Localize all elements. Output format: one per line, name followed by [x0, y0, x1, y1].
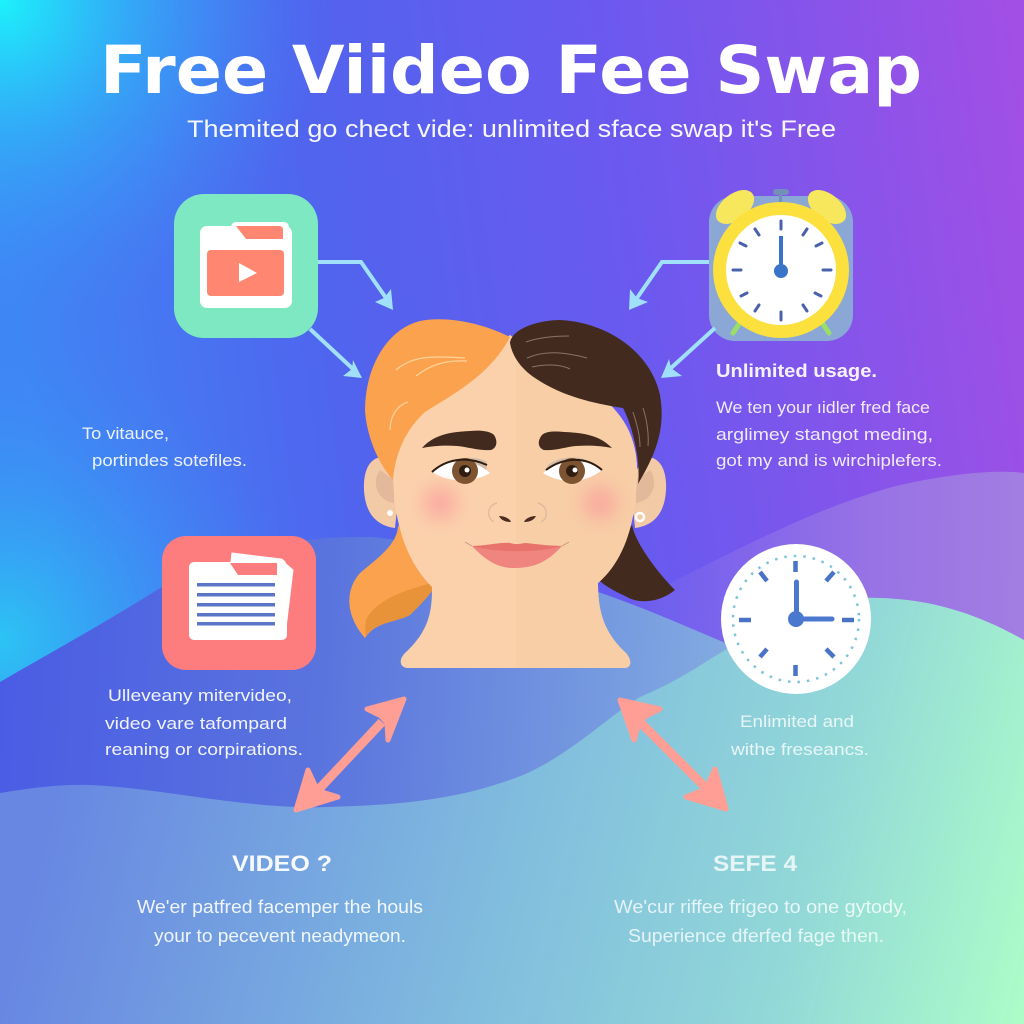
arrow: video folder to head, upper [318, 262, 393, 310]
text block: left upper: portindes sotefiles. [92, 451, 247, 470]
text block: left lower: reaning or corpirations. [105, 740, 303, 759]
icon: video folder [174, 194, 318, 338]
title: Free Viideo Fee Swap [100, 32, 922, 109]
text block: video: VIDEO ? [232, 851, 332, 876]
ear right [630, 457, 666, 528]
text block: unlimited usage: Unlimited usage. [716, 361, 877, 381]
hair lower dark [596, 525, 675, 601]
text block: left lower: video vare tafompard [105, 714, 287, 733]
icon: document folder [162, 536, 316, 670]
text block: video: We'er patfred facemper the houls [137, 897, 423, 917]
skin: face and neck [393, 335, 637, 668]
hair orange [365, 319, 510, 480]
text block: unlimited usage: got my and is wirchiplefers. [716, 451, 942, 470]
text block: video: your to pecevent neadymeon. [154, 926, 406, 946]
text block: left upper [82, 424, 247, 470]
double arrow: lower left [296, 699, 404, 810]
earrings [387, 510, 393, 516]
text block: video [137, 851, 423, 946]
text block: right lower [730, 712, 869, 759]
text block: right lower: Enlimited and [740, 712, 854, 731]
blush [423, 486, 457, 520]
eyebrow right [539, 431, 612, 450]
text block: safe [614, 851, 907, 946]
text block: left upper: To vitauce, [82, 424, 169, 443]
ponytail orange [349, 525, 436, 638]
double arrow: lower right [620, 700, 726, 809]
text block: left lower [105, 686, 303, 759]
eye left [432, 458, 490, 484]
text block: safe: Superience dferfed fage then. [628, 926, 884, 946]
eye right [543, 457, 602, 484]
arrow: alarm clock to head, lower [661, 328, 715, 378]
text block: right lower: withe freseancs. [730, 740, 869, 759]
text block: unlimited usage: We ten your ıidler fred face [716, 398, 930, 417]
central face illustration [349, 319, 675, 668]
subtitle: Themited go chect vide: unlimited sface swap it's Free [187, 116, 836, 143]
arrow: alarm clock to head, upper [629, 262, 709, 310]
hair dark [510, 320, 662, 484]
text block: safe: We'cur riffee frigeo to one gytody, [614, 897, 907, 917]
text block: safe: SEFE 4 [713, 851, 798, 876]
nose [489, 503, 546, 522]
icon: alarm clock [709, 183, 853, 341]
icon: wall clock [721, 544, 871, 694]
text block: unlimited usage: arglimey stangot meding, [716, 425, 933, 444]
eyebrow left [422, 431, 496, 450]
mouth [465, 542, 569, 568]
text block: left lower: Ulleveany mitervideo, [108, 686, 292, 705]
arrow: video folder to head, lower [310, 329, 362, 378]
ear left [364, 457, 400, 528]
text block: unlimited usage [716, 361, 942, 470]
